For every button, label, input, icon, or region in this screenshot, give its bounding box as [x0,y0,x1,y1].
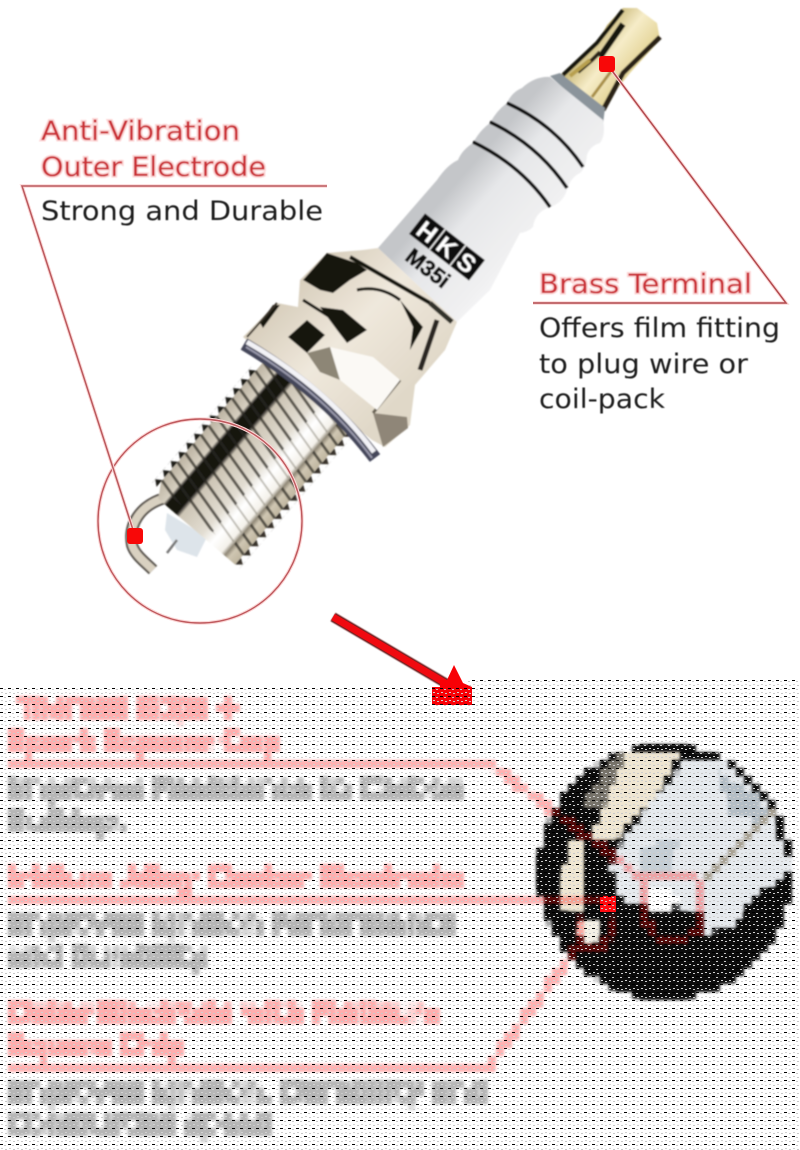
label: outer electrode platinum chip [8,997,488,1139]
icon: brass terminal [550,8,660,124]
callout: leader line to brass terminal [533,56,786,303]
icon: HKS M35i logo: K [431,231,462,264]
red dot: iridium center electrode [600,896,616,912]
callout: leader lines in magnified view [8,764,703,1067]
icon: hex nut with chrome reflections [243,248,457,447]
icon: threaded shell and electrode [131,352,356,570]
icon: HKS M35i logo: H [411,216,442,249]
label: thermal edge [8,692,465,837]
label: outer electrode platinum chip: Outer Electrode with Platinum [8,997,440,1028]
chart: magnified electrode circle [538,745,793,999]
text block: brass terminal [539,269,780,415]
label: iridium center electrode: Improves Ignition Performance [8,908,457,939]
label: outer electrode platinum chip: Combustion speed [8,1108,272,1139]
icon: metal washer ring [244,342,375,458]
text block: anti-vibration outer electrode: Outer Electrode [41,152,266,183]
text block: brass terminal: Offers film fitting [539,313,780,344]
icon: HKS M35i logo: S [451,247,481,279]
arrow: pointing to magnified view [333,617,472,705]
text block: brass terminal: coil-pack [539,384,665,415]
label: thermal edge: Spark Square Cap [8,726,280,757]
text block: brass terminal: to plug wire or [539,349,749,380]
label: iridium center electrode: Iridium Alloy Center Electrode [8,863,462,894]
text block: brass terminal: Brass Terminal [539,269,752,300]
panel: spark plug photo [131,8,660,570]
callout: leader line to outer electrode [22,186,327,544]
text block: anti-vibration outer electrode: Strong and Durable [41,196,323,227]
label: thermal edge: Buildup. [8,806,125,837]
icon: HKS M35i logo [392,213,485,303]
label: thermal edge: Improves Resistance to Carbon [8,773,465,804]
panel: magnified electrode view (mosaic) [8,692,793,1139]
label: outer electrode platinum chip: Improves Ignition, Durability and [8,1076,488,1107]
text block: anti-vibration outer electrode [41,116,323,227]
callout: electrode zoom circle [98,419,302,623]
icon: ribbed white insulator [378,77,604,322]
label: thermal edge: Thermal Edge + [15,692,240,723]
stipple overlay on magnified view [0,680,800,1150]
text block: anti-vibration outer electrode: Anti-Vibration [41,116,240,147]
label: iridium center electrode [8,863,462,972]
label: iridium center electrode: and Durability. [8,941,210,972]
label: outer electrode platinum chip: Square Chip [8,1030,184,1061]
icon: HKS M35i logo: M35i [401,243,455,293]
